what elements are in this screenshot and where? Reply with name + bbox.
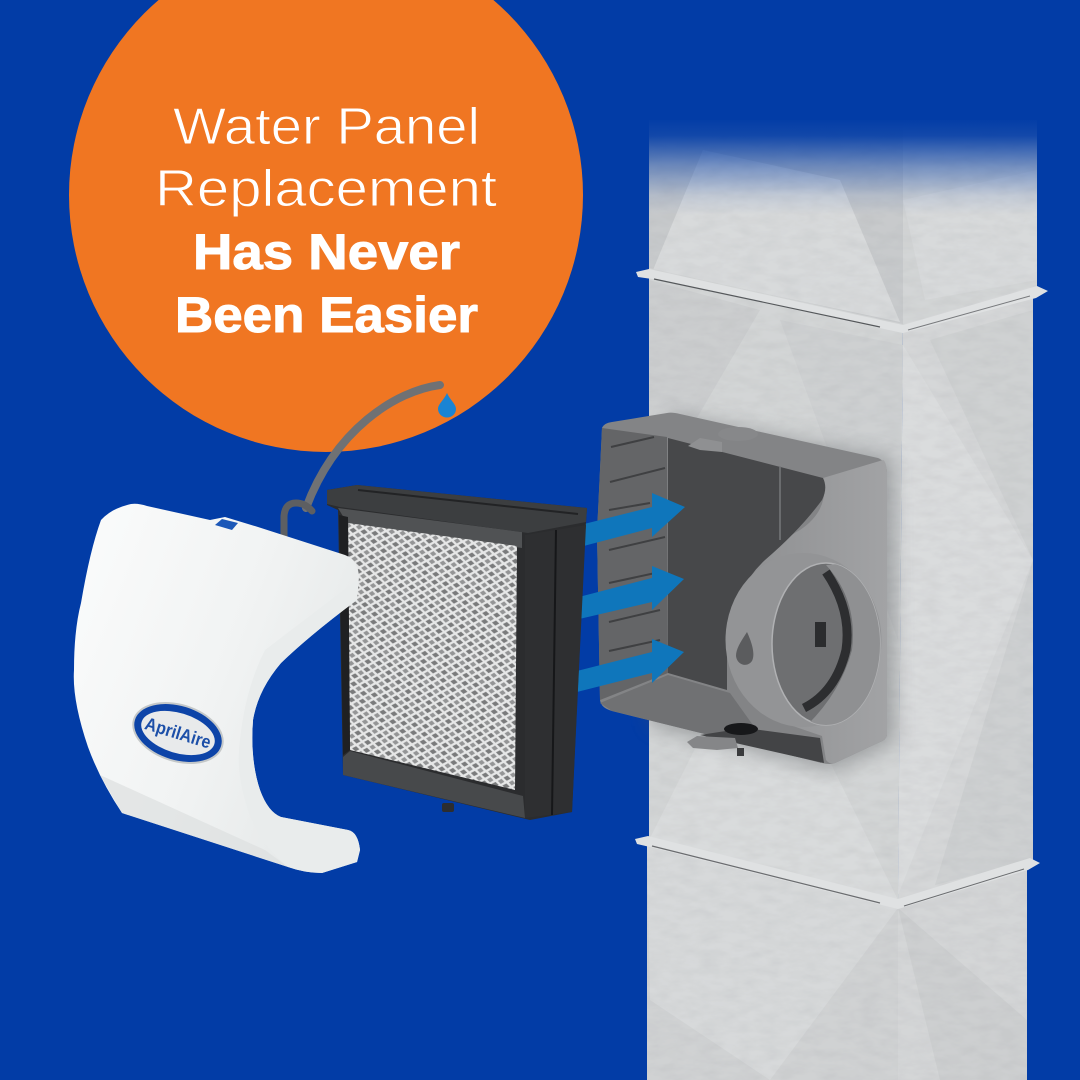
water panel filter: [327, 485, 587, 820]
cover: lower band shadow: [100, 775, 288, 867]
housing: collar opening: [772, 563, 880, 725]
duct: lower section: [647, 838, 1027, 1080]
housing: collar ring: [726, 553, 882, 727]
filter: mesh panel: [348, 523, 517, 790]
housing: upper right body: [725, 460, 887, 764]
logo: text: AprilAire: [143, 713, 213, 753]
filter: side seam: [552, 530, 556, 815]
title: [155, 98, 498, 343]
duct: middle section: [649, 268, 1033, 900]
housing: top round mark: [718, 427, 758, 441]
housing: lower lip: [700, 728, 824, 763]
arrow: bottom: [573, 639, 684, 693]
orange circle: [69, 0, 583, 452]
filter: top cap: [327, 485, 587, 533]
title: line 3: Has Never: [193, 224, 460, 280]
housing shadow on duct: [650, 415, 895, 772]
title: line 2: Replacement: [155, 160, 498, 218]
filter: top bar: [338, 508, 522, 548]
title: line 1: Water Panel: [173, 98, 480, 156]
filter: cap groove: [358, 490, 578, 514]
housing: screw: [737, 748, 744, 756]
housing: bottom tab: [687, 736, 738, 750]
title: line 4: Been Easier: [175, 287, 478, 343]
duct column: [635, 118, 1048, 1080]
housing: outer shell: [597, 413, 887, 764]
arrow: top: [576, 493, 685, 548]
housing: inner crescent: [802, 564, 880, 725]
water hose: [284, 385, 440, 536]
housing: back panel divider: [779, 466, 781, 540]
housing: floor: [600, 675, 822, 763]
humidifier cover: [74, 504, 360, 873]
logo badge: [125, 692, 231, 774]
logo: inner plate: [136, 703, 220, 763]
housing: left wall: [597, 428, 668, 700]
housing: teardrop opening: [736, 632, 753, 665]
filter: left rail: [339, 515, 350, 755]
icon: water drop: [438, 393, 456, 418]
housing: left wall ribs: [609, 437, 665, 651]
cover: inner shaded face: [239, 580, 360, 873]
housing: inner slot: [815, 622, 826, 647]
logo: outer shadow ring: [125, 692, 231, 774]
cover: top window: [215, 519, 238, 530]
filter: right side: [525, 525, 586, 818]
housing: back panel: [668, 438, 825, 690]
housing: bottom hole: [724, 723, 758, 735]
filter: bottom bar: [343, 751, 525, 818]
filter: frame: [327, 485, 587, 820]
flange: upper: [636, 269, 1048, 333]
duct: upper section: [649, 120, 1037, 331]
filter: drain nub: [442, 803, 454, 812]
flange: lower: [635, 836, 1040, 909]
cover: body: [74, 504, 360, 873]
housing: clip: [688, 438, 722, 452]
blue arrows: [573, 493, 685, 693]
logo: blue ring: [127, 694, 229, 772]
duct: top fade into background: [645, 118, 1041, 215]
arrow: middle: [575, 566, 684, 620]
base housing: [597, 413, 887, 764]
